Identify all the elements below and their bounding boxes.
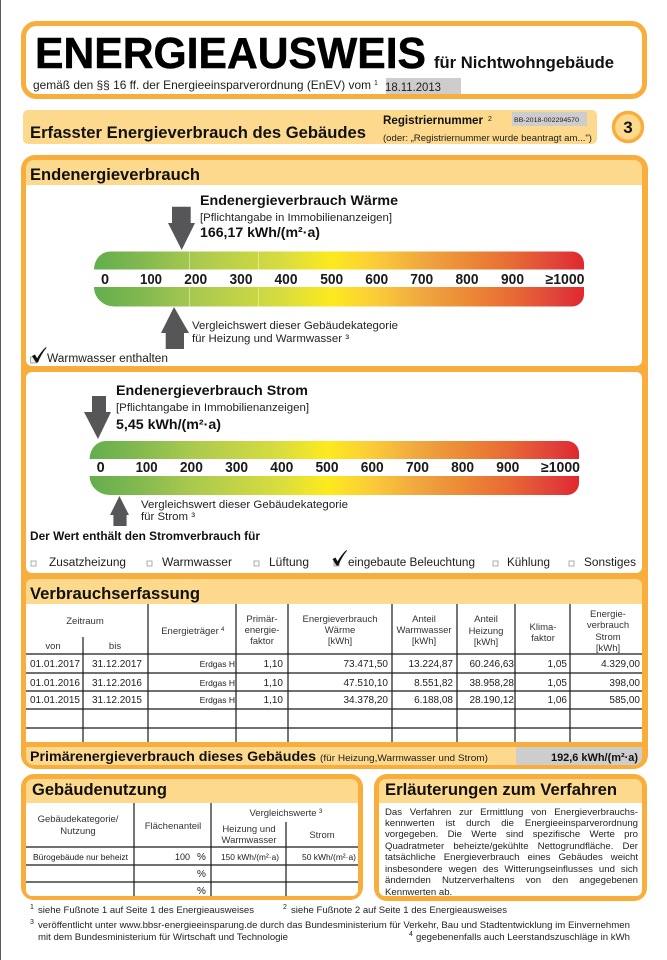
table header: Heizung xyxy=(469,626,503,637)
white text area xyxy=(379,803,642,896)
electricity contents checkboxes: eingebaute Beleuchtung xyxy=(348,557,475,569)
electricity contents checkboxes xyxy=(31,550,636,569)
scale labels: 200 xyxy=(180,460,203,476)
arrow: electricity comparison xyxy=(110,496,129,526)
electricity contents checkboxes: Sonstiges xyxy=(584,557,636,569)
scale labels: 600 xyxy=(361,460,384,476)
table row 2015: 28.190,12 xyxy=(470,695,514,706)
table grid xyxy=(26,604,642,742)
main panel frame xyxy=(21,155,648,769)
table header: Heizung und xyxy=(222,824,276,835)
table row 2017: 1,05 xyxy=(548,659,567,670)
table header: [kWh] xyxy=(412,636,436,647)
scale labels: 700 xyxy=(406,460,429,476)
table row: 50 kWh/(m²·a) xyxy=(302,852,356,862)
table row: % xyxy=(197,886,206,897)
heading band: Verbrauchserfassung xyxy=(26,579,642,604)
footnotes: siehe Fußnote 1 auf Seite 1 des Energieausweises xyxy=(38,905,254,916)
table row 2017: 31.12.2017 xyxy=(92,659,142,670)
electricity value text: 5,45 kWh/(m²·a) xyxy=(116,416,221,432)
table row 2016: 47.510,10 xyxy=(344,678,388,689)
legal basis line: gemäß den §§ 16 ff. der Energieeinsparverordnung (EnEV) vom xyxy=(33,78,371,92)
scale lower bar xyxy=(94,287,584,307)
heading band: Endenergieverbrauch xyxy=(26,160,642,185)
table row 2016: 38.958,28 xyxy=(470,678,514,689)
table header: Primär- xyxy=(246,614,278,625)
scale tick lines xyxy=(190,252,258,306)
electricity comparison text xyxy=(141,499,348,523)
table header: Warmwasser xyxy=(396,625,452,636)
scale labels: 800 xyxy=(451,460,474,476)
method explanation text: ändernden Nutzerverhaltens von den angegebenen xyxy=(385,875,638,886)
method explanation text: Das Verfahren zur Ermittlung von Energieverbrauchs- xyxy=(385,806,638,818)
heat value text xyxy=(200,193,398,241)
heading: Erläuterungen zum Verfahren xyxy=(385,781,617,799)
footer value background xyxy=(516,747,642,765)
method explanation text: kennwerten ist durch die Energieeinsparverordnung xyxy=(385,818,638,829)
heat comparison text xyxy=(192,320,398,345)
table row 2015: Erdgas H xyxy=(200,695,235,705)
table header: Zeitraum xyxy=(66,616,104,627)
footer band xyxy=(26,747,642,765)
footnotes xyxy=(30,904,630,943)
table header: Nutzung xyxy=(60,826,96,837)
electricity comparison text: Vergleichswert dieser Gebäudekategorie xyxy=(141,499,348,511)
table row 2017 xyxy=(30,659,640,670)
table row 2016: 01.01.2016 xyxy=(30,678,80,689)
scale labels: 700 xyxy=(410,272,433,288)
registration label: Registriernummer xyxy=(383,113,483,127)
scale labels: 300 xyxy=(230,272,252,288)
panel: method explanation xyxy=(374,774,647,901)
electricity value text xyxy=(116,382,309,432)
table header: Warmwasser xyxy=(221,835,277,846)
electricity value text: [Pflichtangabe in Immobilienanzeigen] xyxy=(116,402,309,414)
table row 2017: 13.224,87 xyxy=(408,659,453,670)
arrow: electricity value xyxy=(84,396,111,439)
table header: Energieverbrauch xyxy=(302,614,378,625)
electricity gauge xyxy=(90,441,580,495)
footnotes: 3 xyxy=(30,919,34,926)
title: ENERGIEAUSWEIS xyxy=(35,29,426,78)
table header xyxy=(38,808,335,846)
table header: [kWh] xyxy=(328,636,352,647)
scale lower bar xyxy=(90,476,579,495)
subtitle: für Nichtwohngebäude xyxy=(434,53,614,72)
scale upper bar xyxy=(94,252,584,270)
footnotes: gegebenenfalls auch Leerstandszuschläge in kWh xyxy=(416,932,630,943)
electricity contents checkboxes: Warmwasser xyxy=(162,557,232,569)
table row 2015: 01.01.2015 xyxy=(30,695,80,706)
table row 2017: 73.471,50 xyxy=(344,659,388,670)
scale labels: 300 xyxy=(225,460,248,476)
electricity value text: Endenergieverbrauch Strom xyxy=(116,382,308,398)
date field xyxy=(385,78,461,94)
table header: von xyxy=(45,641,61,652)
arrow: heat comparison xyxy=(161,307,189,349)
section band: registration xyxy=(23,110,597,144)
heat comparison text: für Heizung und Warmwasser ³ xyxy=(192,333,349,345)
scale labels: 400 xyxy=(270,460,293,476)
table header: Vergleichswerte xyxy=(249,808,317,819)
electricity contents checkboxes: Zusatzheizung xyxy=(49,557,126,569)
table header: Wärme xyxy=(325,625,355,636)
table row: 150 kWh/(m²·a) xyxy=(221,852,279,862)
table header: Anteil xyxy=(412,614,436,625)
hot water checkbox with check mark xyxy=(30,347,46,363)
table row 2017: 4.329,00 xyxy=(601,659,640,670)
footnote mark: 1 xyxy=(374,80,378,87)
footnotes: 4 xyxy=(409,931,413,938)
table row 2016 xyxy=(30,678,640,689)
registration number field: BB-2018-002294570 xyxy=(514,117,579,124)
page number badge xyxy=(614,112,642,142)
check mark: lighting xyxy=(332,550,347,566)
table header: Klima- xyxy=(530,622,556,633)
table header: 3 xyxy=(319,809,323,815)
table header: Strom xyxy=(309,830,335,841)
table row: % xyxy=(197,852,206,863)
table row 2017: 60.246,63 xyxy=(470,659,514,670)
panel: building use xyxy=(21,774,363,900)
table row 2015 xyxy=(30,695,640,706)
primary energy footer text xyxy=(30,749,638,765)
method explanation text: tatsächliche Energieverbrauch eines Gebäudes weicht xyxy=(385,852,638,863)
heat value text: 166,17 kWh/(m²·a) xyxy=(200,225,320,241)
scale labels: 0 xyxy=(97,460,105,476)
table row 2015: 585,00 xyxy=(609,695,640,706)
scale labels: 400 xyxy=(274,272,298,288)
footnotes: 1 xyxy=(30,904,34,911)
header panel xyxy=(24,24,644,96)
primary energy footer text: 192,6 kWh/(m²·a) xyxy=(551,752,638,764)
table row 2015: 6.188,08 xyxy=(414,695,453,706)
heat value text: [Pflichtangabe in Immobilienanzeigen] xyxy=(200,212,392,224)
table row 2015: 1,06 xyxy=(548,695,567,706)
table row 2016: Erdgas H xyxy=(200,678,235,688)
scale upper bar xyxy=(90,441,579,459)
primary energy footer text: (für Heizung,Warmwasser und Strom) xyxy=(320,753,488,764)
table row 2015: 34.378,20 xyxy=(344,695,388,706)
table header: [kWh] xyxy=(474,637,498,648)
table row: Bürogebäude nur beheizt xyxy=(33,852,129,862)
electricity contents checkboxes: Lüftung xyxy=(269,557,309,569)
white panel: electricity xyxy=(26,372,642,573)
method explanation text: vorgegeben. Die Werte sind spezifische Werte pro xyxy=(385,829,638,840)
table header: Gebäudekategorie/ xyxy=(38,814,119,825)
table row 2016: 8.551,82 xyxy=(414,678,453,689)
scale labels: 0 xyxy=(101,272,109,288)
table row: 100 xyxy=(175,852,190,862)
electricity contents heading: Der Wert enthält den Stromverbrauch für xyxy=(30,531,261,543)
table background xyxy=(26,604,642,742)
method explanation text: insbesondere wegen des Witterungseinflusses und sich xyxy=(385,864,638,875)
scale labels xyxy=(101,272,584,288)
heat gauge xyxy=(94,252,584,307)
table row: % xyxy=(197,869,206,880)
scale labels: 900 xyxy=(501,272,524,288)
method explanation text xyxy=(385,806,638,898)
table header: faktor xyxy=(531,633,555,644)
method explanation text: Kennwerten ab. xyxy=(385,887,452,898)
footnotes: siehe Fußnote 2 auf Seite 1 des Energieausweises xyxy=(291,905,507,916)
band heading: Erfasster Energieverbrauch des Gebäudes xyxy=(30,124,366,142)
electricity contents checkboxes: Kühlung xyxy=(507,557,550,569)
method explanation text: Quadratmeter beheizte/gekühlte Nettogrundfläche. Der xyxy=(385,841,638,852)
arrow: heat value xyxy=(168,207,195,250)
primary energy footer text: Primärenergieverbrauch dieses Gebäudes xyxy=(30,749,316,765)
table header xyxy=(45,609,629,654)
registration note: (oder: „Registriernummer wurde beantragt am...") xyxy=(383,133,592,144)
scale labels xyxy=(97,460,580,476)
table header: Flächenanteil xyxy=(145,821,201,832)
page number badge: 3 xyxy=(623,118,633,137)
table row 2016: 398,00 xyxy=(609,678,640,689)
hot water label: Warmwasser enthalten xyxy=(47,353,168,365)
table header: verbrauch xyxy=(587,620,629,631)
white panel: heat xyxy=(26,185,642,366)
table row 2015: 1,10 xyxy=(264,695,283,706)
footnotes: veröffentlicht unter www.bbsr-energieeinsparung.de durch das Bundesministerium für Verkehr, Bau und Stadtentwicklung im Einvernehmen xyxy=(38,920,630,931)
footnotes: 2 xyxy=(283,904,287,911)
table row 2016: 1,05 xyxy=(548,678,567,689)
heading band xyxy=(26,779,358,803)
heading: Endenergieverbrauch: Endenergieverbrauch xyxy=(30,166,200,184)
table header: faktor xyxy=(250,636,274,647)
table header: 4 xyxy=(221,627,225,633)
heat value text: Endenergieverbrauch Wärme xyxy=(200,193,398,209)
table header: bis xyxy=(109,641,121,652)
table header: [kWh] xyxy=(596,643,620,654)
white table area xyxy=(26,803,358,896)
heading band xyxy=(379,779,642,803)
scale labels: 500 xyxy=(320,272,343,288)
table row 2016: 1,10 xyxy=(264,678,283,689)
footnote mark: 2 xyxy=(488,116,492,123)
table header: Anteil xyxy=(474,614,498,625)
table row 2017: 01.01.2017 xyxy=(30,659,80,670)
table header: Energieträger xyxy=(161,626,219,637)
scale labels: 100 xyxy=(140,272,162,288)
electricity comparison text: für Strom ³ xyxy=(141,511,195,523)
table row 2015: 31.12.2015 xyxy=(92,695,142,706)
table row xyxy=(33,852,356,897)
scale labels: 500 xyxy=(316,460,338,476)
table header: Energie- xyxy=(590,609,626,620)
footnotes: mit dem Bundesministerium für Wirtschaft und Technologie xyxy=(38,932,288,943)
heading: Gebäudenutzung xyxy=(32,781,167,799)
registration number field xyxy=(512,112,587,126)
consumption table xyxy=(26,604,642,742)
scale labels: 200 xyxy=(184,272,207,288)
scale labels: 800 xyxy=(456,272,478,288)
heading: Verbrauchserfassung: Verbrauchserfassung xyxy=(30,585,200,603)
table grid xyxy=(26,803,358,896)
table row 2017: Erdgas H xyxy=(200,659,235,669)
date field: 18.11.2013 xyxy=(385,82,441,94)
scale labels: 900 xyxy=(496,460,519,476)
table row 2016: 31.12.2016 xyxy=(92,678,142,689)
heat comparison text: Vergleichswert dieser Gebäudekategorie xyxy=(192,320,398,332)
table row 2017: 1,10 xyxy=(264,659,283,670)
scale labels: ≥1000 xyxy=(546,272,584,288)
scale labels: ≥1000 xyxy=(541,460,580,476)
scale labels: 600 xyxy=(365,272,388,288)
table header: energie- xyxy=(245,625,279,636)
scale labels: 100 xyxy=(136,460,158,476)
table header: Strom xyxy=(595,632,621,643)
